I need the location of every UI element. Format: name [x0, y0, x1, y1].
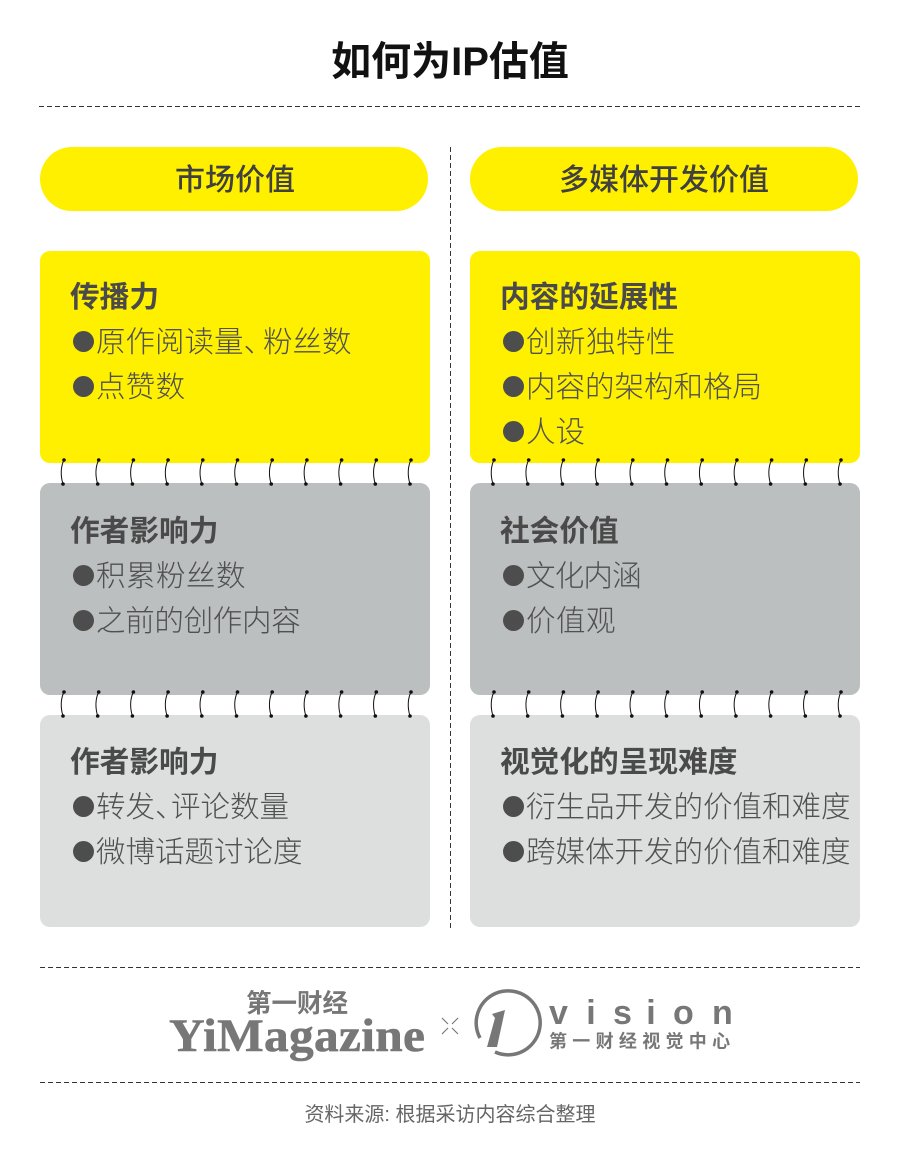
panel: content extensibility — [470, 251, 860, 463]
logo: YiMagazine — [168, 990, 425, 1062]
logo Chinese name: 第一财经 — [246, 990, 348, 1018]
panel: visual presentation difficulty — [470, 715, 860, 927]
source note: 资料来源: 根据采访内容综合整理 — [304, 1104, 596, 1126]
list item: 之前的创作内容 — [96, 605, 300, 638]
icon: cross separator — [442, 1018, 458, 1034]
heading pill: multimedia development value — [470, 147, 858, 211]
heading pill: market value: 市场价值 — [175, 164, 295, 197]
list item: 价值观 — [526, 605, 616, 638]
wordmark Chinese caption: 第一财经视觉中心 — [549, 1030, 735, 1052]
logo: vision circle — [474, 989, 542, 1057]
heading pill: market value — [40, 147, 428, 211]
panel heading: 作者影响力 — [70, 746, 218, 779]
list item: 人设 — [526, 416, 585, 449]
panel: author influence — [40, 483, 430, 695]
heading pill: multimedia development value: 多媒体开发价值 — [559, 164, 769, 197]
panel heading: 社会价值 — [500, 515, 619, 548]
panel: social value — [470, 483, 860, 695]
panel heading: 内容的延展性 — [500, 281, 678, 314]
panel: author influence, social — [40, 715, 430, 927]
list item: 原作阅读量、粉丝数 — [96, 326, 352, 359]
list item: 跨媒体开发的价值和难度 — [526, 836, 851, 869]
list item: 积累粉丝数 — [96, 560, 246, 593]
panel heading: 传播力 — [70, 281, 159, 314]
wordmark letters: vision — [549, 994, 733, 1032]
panel: reach — [40, 251, 430, 463]
logo: vision wordmark — [549, 994, 735, 1052]
list item: 文化内涵 — [526, 560, 641, 593]
list item: 微博话题讨论度 — [96, 836, 303, 869]
list item: 创新独特性 — [526, 326, 676, 359]
logo wordmark: YiMagazine — [168, 1010, 425, 1062]
list item: 转发、评论数量 — [96, 791, 289, 824]
list item: 衍生品开发的价值和难度 — [526, 791, 851, 824]
list item: 内容的架构和格局 — [526, 371, 762, 404]
panel heading: 视觉化的呈现难度 — [500, 746, 738, 779]
panel heading: 作者影响力 — [70, 515, 218, 548]
title: 如何为IP估值 — [331, 40, 569, 84]
list item: 点赞数 — [96, 371, 185, 404]
